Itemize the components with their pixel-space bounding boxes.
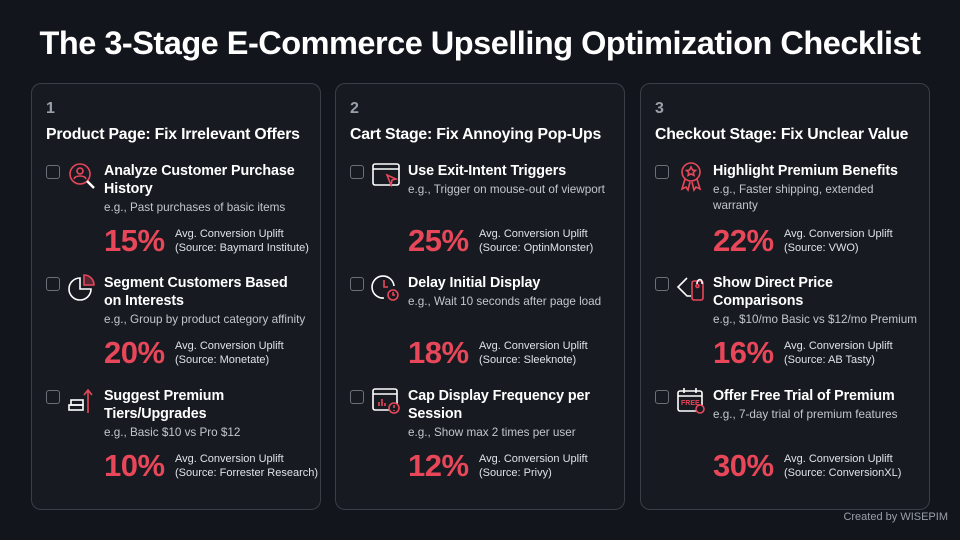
item: exit intent [350, 163, 605, 258]
item: analyze history: History [104, 181, 153, 197]
item: cap frequency: 12% [408, 448, 469, 483]
item: delay display: e.g., Wait 10 seconds after page load [408, 295, 601, 308]
item: price comparisons: Avg. Conversion Uplift [784, 340, 893, 352]
panel: product page [31, 83, 321, 510]
item: free trial: e.g., 7-day trial of premium features [713, 408, 897, 421]
item: delay display: 18% [408, 335, 469, 370]
item: segment customers: Segment Customers Based [104, 275, 288, 291]
icon: calendar free: FREE [681, 400, 700, 407]
panel: checkout stage: 3 [655, 100, 664, 117]
item: cap frequency: Cap Display Frequency per [408, 388, 590, 404]
item: exit intent: Use Exit-Intent Triggers [408, 163, 566, 179]
item: highlight benefits: (Source: VWO) [784, 242, 859, 254]
icon: pie chart [68, 274, 95, 301]
icon: price tags [677, 277, 704, 301]
panel: checkout stage [640, 83, 930, 510]
item: delay display: Delay Initial Display [408, 275, 540, 291]
icon: calendar free [677, 388, 705, 414]
item: highlight benefits: warranty [713, 199, 758, 212]
item: exit intent: e.g., Trigger on mouse-out of viewport [408, 183, 605, 196]
icon: bars upgrade [68, 388, 92, 413]
item: cap frequency: Avg. Conversion Uplift [479, 453, 588, 465]
item: free trial [655, 388, 901, 483]
item: cap frequency: (Source: Privy) [479, 467, 552, 479]
item: free trial: 30% [713, 448, 774, 483]
footer credit: Created by WISEPIM [843, 511, 948, 523]
item: price comparisons: Show Direct Price [713, 275, 833, 291]
item: analyze history: Analyze Customer Purchase [104, 163, 295, 179]
item: highlight benefits: 22% [713, 223, 774, 258]
icon: browser cursor [372, 163, 400, 188]
item: analyze history [46, 163, 309, 258]
heading: cart stage: Cart Stage: Fix Annoying Pop-Ups [350, 126, 601, 143]
item: highlight benefits: e.g., Faster shipping, extended [713, 183, 873, 196]
item: suggest premium: Avg. Conversion Uplift [175, 453, 284, 465]
item: analyze history: 15% [104, 223, 165, 258]
panel: cart stage [335, 83, 625, 510]
item: analyze history: (Source: Baymard Institute) [175, 242, 309, 254]
item: suggest premium: Tiers/Upgrades [104, 406, 206, 422]
item: highlight benefits [655, 162, 898, 258]
item: price comparisons: 16% [713, 335, 774, 370]
item: delay display: Avg. Conversion Uplift [479, 340, 588, 352]
item: free trial: Avg. Conversion Uplift [784, 453, 893, 465]
item: free trial: Offer Free Trial of Premium [713, 388, 895, 404]
item: analyze history: Avg. Conversion Uplift [175, 228, 284, 240]
item: segment customers: e.g., Group by product category affinity [104, 313, 305, 326]
item: suggest premium: 10% [104, 448, 165, 483]
item: price comparisons: e.g., $10/mo Basic vs $12/mo Premium [713, 313, 917, 326]
item: exit intent: 25% [408, 223, 469, 258]
item: exit intent: (Source: OptinMonster) [479, 242, 593, 254]
item: segment customers: (Source: Monetate) [175, 354, 269, 366]
item: cap frequency: e.g., Show max 2 times per user [408, 426, 576, 439]
item: price comparisons: Comparisons [713, 293, 803, 309]
item: exit intent: Avg. Conversion Uplift [479, 228, 588, 240]
item: analyze history: e.g., Past purchases of basic items [104, 201, 285, 214]
item: suggest premium: (Source: Forrester Research) [175, 467, 318, 479]
icon: user search [69, 163, 95, 189]
item: segment customers: Avg. Conversion Uplift [175, 340, 284, 352]
item: segment customers: 20% [104, 335, 165, 370]
item: suggest premium [46, 388, 318, 483]
icon: browser alert [372, 388, 400, 414]
icon: award [680, 162, 702, 192]
item: delay display: (Source: Sleeknote) [479, 354, 576, 366]
heading: product page: Product Page: Fix Irrelevant Offers [46, 126, 300, 143]
item: free trial: (Source: ConversionXL) [784, 467, 901, 479]
item: highlight benefits: Highlight Premium Benefits [713, 163, 898, 179]
item: suggest premium: Suggest Premium [104, 388, 224, 404]
item: delay display [350, 275, 601, 370]
item: suggest premium: e.g., Basic $10 vs Pro $12 [104, 426, 240, 439]
item: price comparisons [655, 275, 917, 370]
heading: checkout: Checkout Stage: Fix Unclear Value [655, 126, 908, 143]
panel: cart stage: 2 [350, 100, 359, 117]
title: The 3-Stage E-Commerce Upselling Optimization Checklist [40, 25, 920, 61]
item: cap frequency [350, 388, 590, 483]
panel: product page: 1 [46, 100, 55, 117]
icon: clock [371, 275, 399, 301]
item: segment customers [46, 274, 306, 370]
item: segment customers: on Interests [104, 293, 184, 309]
item: highlight benefits: Avg. Conversion Uplift [784, 228, 893, 240]
item: cap frequency: Session [408, 406, 462, 422]
item: price comparisons: (Source: AB Tasty) [784, 354, 875, 366]
